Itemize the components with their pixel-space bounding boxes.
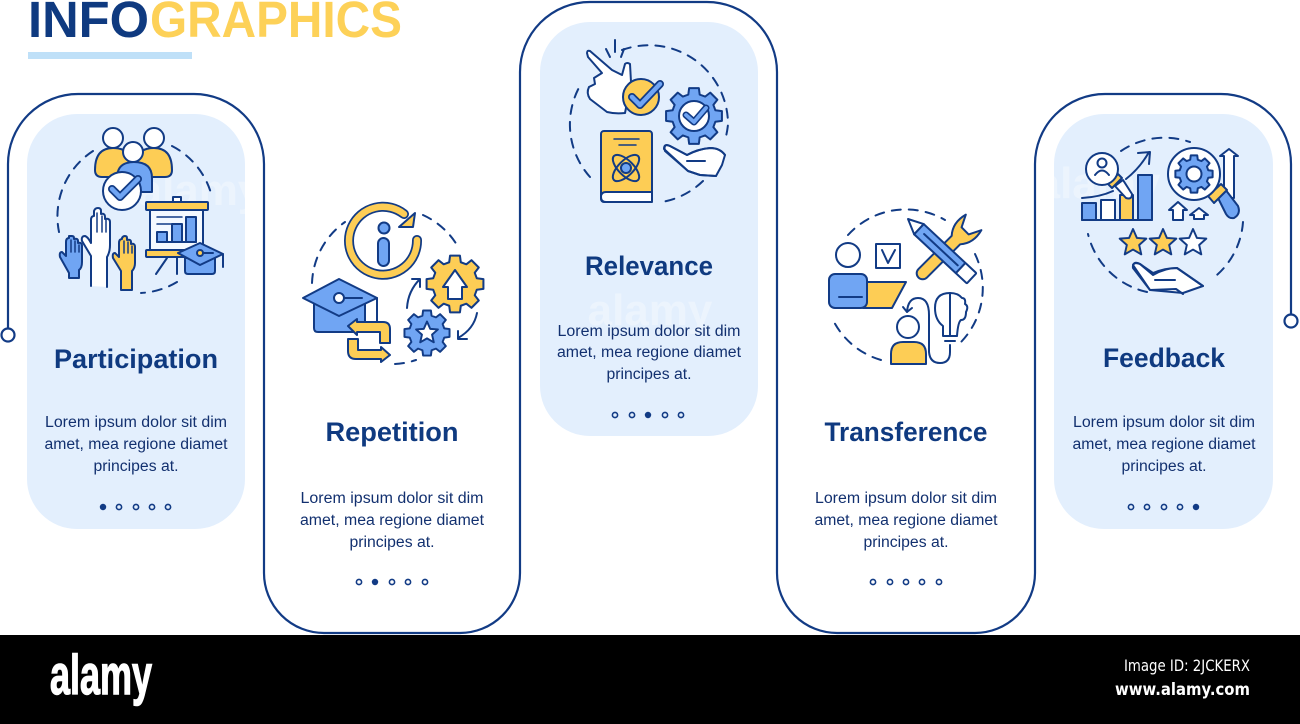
text block: transference: Lorem ipsum dolor sit dim [815,490,997,507]
text block: feedback: amet, mea regione diamet [1072,436,1256,453]
panel: relevance: alamy [588,286,713,335]
text block: participation: amet, mea regione diamet [44,436,228,453]
icon: participation [57,128,223,293]
text block: repetition [300,490,485,551]
icon: repetition [303,207,483,364]
panel: participation: alamy [138,166,263,215]
text block: repetition: principes at. [350,534,434,551]
title [28,0,402,48]
text block: feedback [1072,414,1256,475]
panel: participation [27,114,263,529]
pagination dots [870,579,942,585]
text block: participation: Lorem ipsum dolor sit dim [45,414,227,431]
icon: feedback [1082,138,1243,294]
pagination dots [612,412,684,418]
image id: Image ID: 2JCKERX [1124,656,1250,675]
pagination dots [1128,504,1199,510]
text block: feedback: Lorem ipsum dolor sit dim [1073,414,1255,431]
text block: relevance: Lorem ipsum dolor sit dim [558,323,740,340]
title underline bar [28,52,192,59]
heading: participation: Participation [54,344,218,374]
panel: transference [814,209,998,585]
heading: transference: Transference [824,417,988,447]
text block: participation: principes at. [94,458,178,475]
footer logo: alamy [50,643,152,706]
text block: relevance: principes at. [606,366,692,383]
panel: repetition [300,207,485,585]
website: www.alamy.com [1115,680,1250,700]
footer band [0,635,1300,724]
text block: relevance [557,323,742,383]
icon: relevance [570,40,728,202]
text block: feedback: principes at. [1122,458,1206,475]
heading: repetition: Repetition [326,417,458,447]
heading: feedback: Feedback [1103,343,1226,373]
pagination dots [100,504,171,510]
icon: transference [829,209,983,364]
heading: relevance: Relevance [585,251,713,281]
text block: repetition: Lorem ipsum dolor sit dim [300,490,484,507]
text block: repetition: amet, mea regione diamet [300,512,485,529]
pagination dots [356,579,428,585]
text block: transference: principes at. [864,534,948,551]
panel: relevance [540,22,758,436]
panel: feedback [1036,114,1273,529]
text block: transference: amet, mea regione diamet [814,512,998,529]
text block: participation [44,414,228,475]
text block: relevance: amet, mea regione diamet [557,344,742,361]
panel: feedback: alamy [1036,159,1161,208]
text block: transference [814,490,998,551]
